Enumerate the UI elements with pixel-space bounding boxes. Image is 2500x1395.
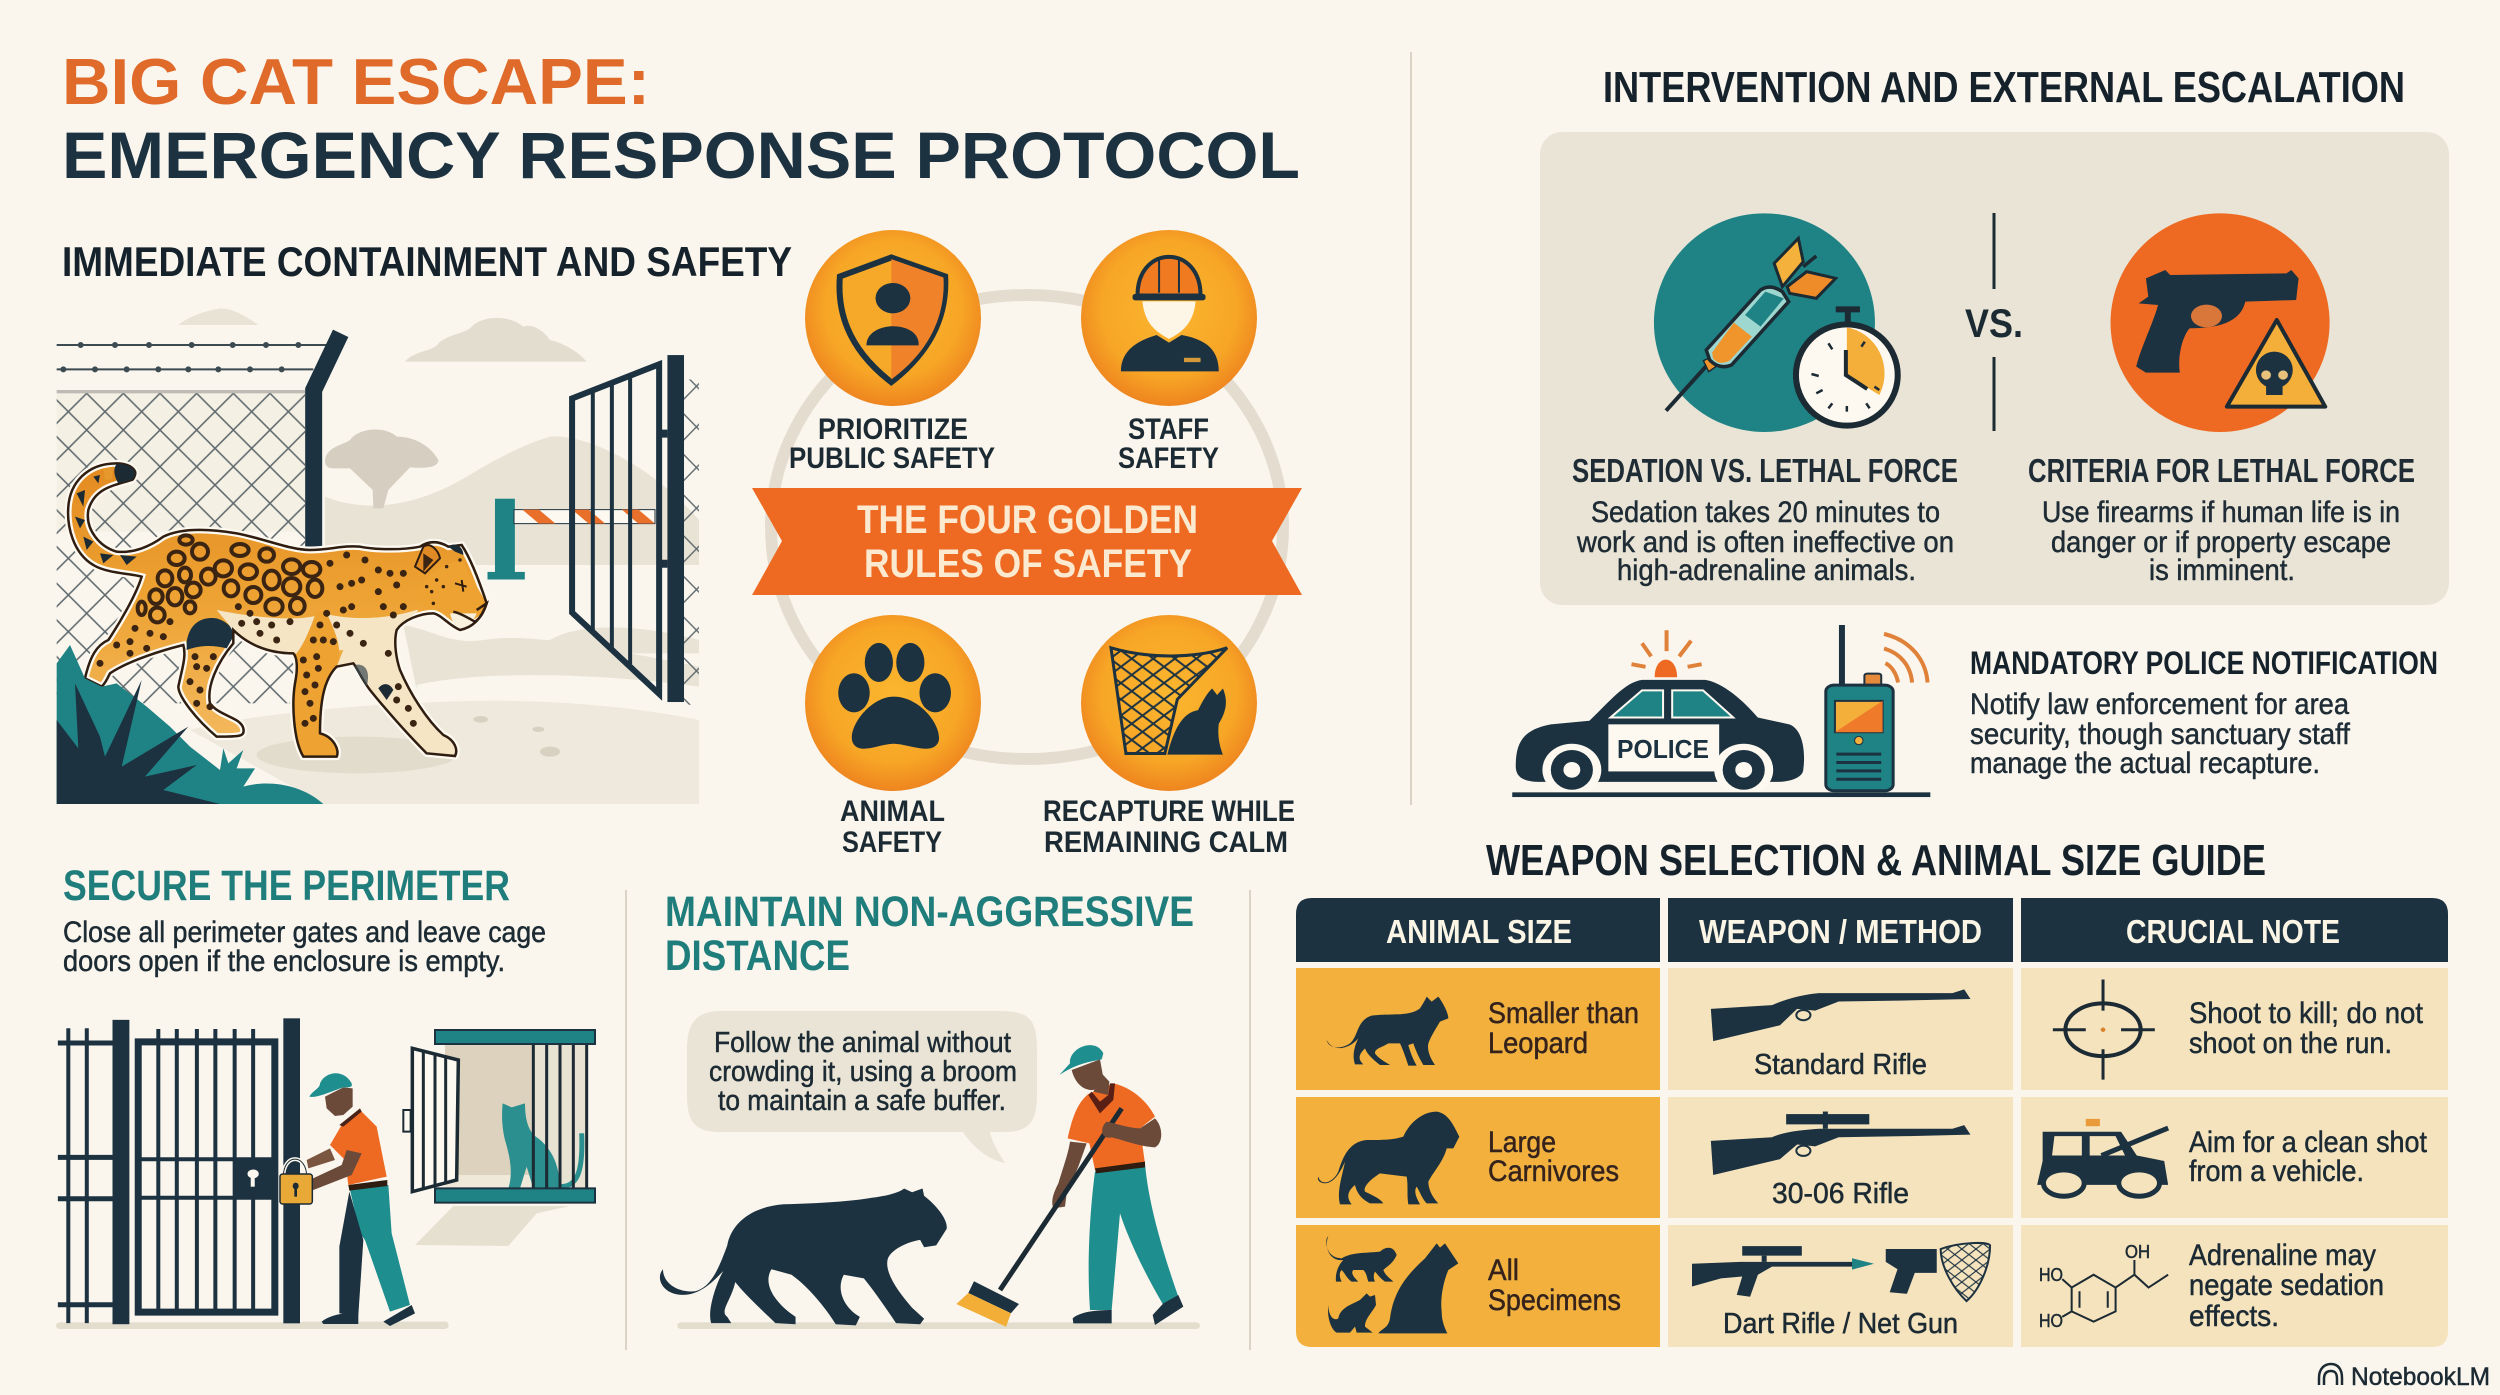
table row: all specimens: negate sedation	[2189, 1269, 2384, 1302]
icon: tranquilizer dart and stopwatch	[1654, 213, 1898, 432]
table header: CRUCIAL NOTE	[2126, 913, 2340, 950]
section: secure the perimeter: SECURE THE PERIMETER	[63, 862, 510, 910]
table row: all specimens: effects.	[2189, 1300, 2279, 1333]
title: EMERGENCY RESPONSE PROTOCOL	[62, 118, 1300, 192]
rule: recapture while remaining calm: RECAPTURE WHILE	[1043, 795, 1295, 828]
callout: speech bubble: to maintain a safe buffer.	[718, 1085, 1006, 1117]
text: mandatory police notification: Notify law enforcement for area	[1970, 688, 2349, 721]
table row: large carnivores: Aim for a clean shot	[2189, 1126, 2428, 1159]
icon: police car and radio: POLICE	[1617, 734, 1709, 764]
banner: the four golden rules of safety: RULES OF SAFETY	[864, 542, 1192, 586]
icon: crosshair	[2053, 980, 2155, 1080]
logo: NotebookLM: NotebookLM	[2351, 1363, 2490, 1391]
callout: speech bubble	[687, 1011, 1037, 1163]
text: sedation vs lethal force: Sedation takes 20 minutes to	[1591, 496, 1940, 529]
title: BIG CAT ESCAPE:	[62, 45, 650, 118]
icon: small cat	[1327, 997, 1448, 1066]
table row: large carnivores: 30-06 Rifle	[1772, 1178, 1909, 1210]
banner: the four golden rules of safety	[752, 488, 1302, 595]
section: secure the perimeter: doors open if the enclosure is empty.	[63, 945, 505, 978]
illustration: leopard escaping past fence and gate	[57, 308, 699, 804]
icon: police car and radio	[1512, 625, 1930, 797]
title	[62, 45, 1300, 192]
section heading: maintain non-aggressive distance: DISTANCE	[665, 932, 850, 980]
diagram: four golden rules ring	[752, 230, 1302, 859]
icon: dart rifle and net gun	[1692, 1243, 1990, 1301]
leopard	[68, 463, 487, 757]
table row: smaller than leopard	[1296, 968, 2448, 1090]
text: criteria for lethal force: danger or if property escape	[2051, 526, 2391, 559]
table: weapon selection guide	[1296, 898, 2448, 1347]
illustration: panther followed by worker with broom	[660, 1045, 1200, 1329]
rule: recapture while remaining calm	[1043, 615, 1295, 859]
table row: all specimens: Specimens	[1488, 1284, 1621, 1317]
panel: sedation versus lethal force	[1540, 132, 2449, 605]
table row: smaller than leopard: Shoot to kill; do not	[2189, 997, 2424, 1030]
table row: all specimens: Dart Rifle / Net Gun	[1723, 1308, 1958, 1340]
rule: animal safety	[805, 615, 981, 859]
icon: adrenaline molecule: HO	[2039, 1265, 2063, 1285]
rule: staff safety	[1081, 230, 1257, 475]
table row: smaller than leopard: Leopard	[1488, 1027, 1588, 1060]
illustration: gate, worker with padlock and open cage	[56, 1018, 595, 1329]
callout: speech bubble: Follow the animal without	[714, 1027, 1011, 1059]
text: mandatory police notification	[1970, 645, 2438, 780]
table row: all specimens: All	[1488, 1254, 1519, 1287]
table row: large carnivores: Carnivores	[1488, 1155, 1619, 1188]
icon: lion	[1318, 1112, 1459, 1204]
rule: animal safety: SAFETY	[842, 826, 942, 859]
section: secure the perimeter: Close all perimeter gates and leave cage	[63, 916, 546, 949]
icon: scoped 30-06 rifle	[1711, 1112, 1970, 1175]
icon: standard rifle	[1711, 989, 1970, 1041]
table row: smaller than leopard: shoot on the run.	[2189, 1027, 2392, 1060]
table row: large carnivores: from a vehicle.	[2189, 1155, 2364, 1188]
icon: adrenaline molecule: HO	[2039, 1311, 2063, 1331]
icon: handgun with warning sign	[2111, 213, 2330, 432]
text: mandatory police notification: manage the actual recapture.	[1970, 747, 2320, 780]
icon: group of cats	[1326, 1236, 1458, 1333]
table row: all specimens	[1296, 1225, 2448, 1347]
callout: speech bubble: crowding it, using a broom	[709, 1056, 1017, 1088]
ring	[771, 295, 1283, 759]
icon: adrenaline molecule	[2039, 1242, 2168, 1331]
table row: smaller than leopard: Standard Rifle	[1754, 1049, 1927, 1081]
table header: WEAPON / METHOD	[1699, 913, 1982, 950]
rule: animal safety: ANIMAL	[840, 795, 945, 828]
text: criteria for lethal force: is imminent.	[2149, 554, 2295, 587]
table row: smaller than leopard: Smaller than	[1488, 997, 1639, 1030]
text: sedation vs lethal force: high-adrenaline animals.	[1617, 554, 1916, 587]
heading: weapon selection and animal size guide: WEAPON SELECTION & ANIMAL SIZE GUIDE	[1486, 836, 2266, 885]
section heading: maintain non-aggressive distance: MAINTAIN NON-AGGRESSIVE	[665, 888, 1194, 936]
text: sedation vs lethal force	[1572, 452, 1958, 587]
banner: the four golden rules of safety: THE FOUR GOLDEN	[857, 498, 1198, 542]
icon: adrenaline molecule: OH	[2125, 1242, 2150, 1262]
rule: prioritize public safety	[789, 230, 995, 475]
rule: prioritize public safety: PRIORITIZE	[818, 413, 968, 446]
text: vs divider: VS.	[1965, 302, 2023, 346]
rule: staff safety: STAFF	[1128, 413, 1209, 446]
section heading: maintain non-aggressive distance	[665, 888, 1194, 980]
rule: prioritize public safety: PUBLIC SAFETY	[789, 442, 995, 475]
table row: all specimens: Adrenaline may	[2189, 1239, 2376, 1272]
table header	[1296, 898, 2448, 962]
text: sedation vs lethal force: work and is often ineffective on	[1576, 526, 1954, 559]
text: mandatory police notification: security, though sanctuary staff	[1970, 718, 2351, 751]
text: criteria for lethal force: Use firearms if human life is in	[2042, 496, 2400, 529]
table header: ANIMAL SIZE	[1386, 913, 1572, 950]
text: sedation vs lethal force: SEDATION VS. LETHAL FORCE	[1572, 452, 1958, 489]
table row: large carnivores	[1296, 1097, 2448, 1218]
rule: recapture while remaining calm: REMAINING CALM	[1044, 826, 1288, 859]
heading: immediate containment and safety: IMMEDIATE CONTAINMENT AND SAFETY	[62, 238, 792, 285]
icon: vehicle with rifle	[2037, 1119, 2168, 1196]
text: criteria for lethal force	[2028, 452, 2415, 587]
rule: staff safety: SAFETY	[1118, 442, 1219, 475]
section: secure the perimeter	[63, 862, 546, 978]
table row: large carnivores: Large	[1488, 1126, 1556, 1159]
